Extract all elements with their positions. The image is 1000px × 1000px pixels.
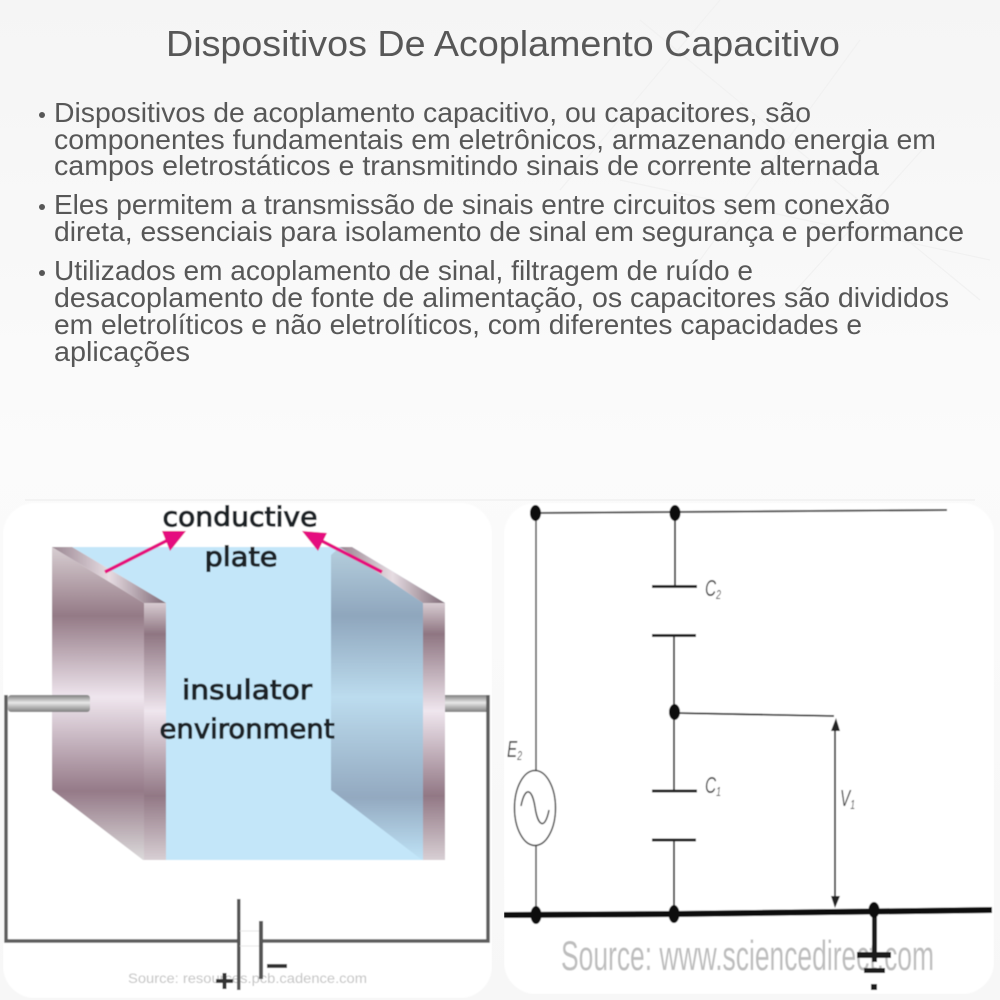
bullet 1 xyxy=(39,97,936,181)
capacitor branch xyxy=(652,513,697,915)
bullet 3: aplicações xyxy=(54,336,190,367)
label: C2: C xyxy=(705,575,722,601)
left conductive plate xyxy=(52,547,166,860)
bottom rail xyxy=(504,910,992,915)
bullet 3: em eletrolíticos e não eletrolíticos, com diferentes capacidades e xyxy=(54,309,862,340)
bullet list xyxy=(39,97,964,367)
left pin xyxy=(8,695,90,712)
label: insulator environment: environment xyxy=(160,714,334,745)
label: V1: V xyxy=(840,785,855,811)
right pin xyxy=(445,695,488,712)
label: E2: 2 xyxy=(517,748,523,763)
bullet 3 xyxy=(39,255,949,367)
battery symbol xyxy=(216,899,287,990)
label: C2: 2 xyxy=(715,587,722,602)
bullet 2 xyxy=(39,189,964,247)
panel: capacitor illustration xyxy=(3,502,492,998)
label: V1: 1 xyxy=(850,797,855,812)
left arrow xyxy=(105,531,186,572)
label: C1: C xyxy=(705,772,722,798)
circuit wire xyxy=(6,695,488,941)
ground symbol xyxy=(857,912,891,990)
bullet 2: direta, essenciais para isolamento de sinal em segurança e performance xyxy=(54,216,964,247)
voltage measurement xyxy=(675,713,840,908)
label: conductive plate: plate xyxy=(204,542,278,573)
right arrow xyxy=(302,531,382,572)
title: Dispositivos De Acoplamento Capacitivo xyxy=(166,23,840,64)
right conductive plate xyxy=(331,547,445,860)
insulator block xyxy=(72,547,445,860)
bullet 2: Eles permitem a transmissão de sinais entre circuitos sem conexão xyxy=(54,189,890,220)
bullet 1: componentes fundamentais em eletrônicos, armazenando energia em xyxy=(54,124,936,155)
source branch xyxy=(514,513,556,915)
label: insulator environment xyxy=(160,675,334,745)
bullet 1: campos eletrostáticos e transmitindo sinais de corrente alternada xyxy=(54,150,880,181)
junction nodes xyxy=(530,505,880,924)
label: E2: E xyxy=(507,736,522,762)
bullet 3: desacoplamento de fonte de alimentação, os capacitores são divididos xyxy=(54,282,949,313)
label: conductive plate: conductive xyxy=(162,502,318,533)
bullet 1: Dispositivos de acoplamento capacitivo, ou capacitores, são xyxy=(54,97,811,128)
label: conductive plate xyxy=(162,502,318,573)
label: insulator environment: insulator xyxy=(182,675,313,706)
top rail xyxy=(536,510,947,513)
source note: Source: resources.pcb.cadence.com xyxy=(128,971,367,986)
label: C1: 1 xyxy=(716,784,721,799)
bullet 3: Utilizados em acoplamento de sinal, filtragem de ruído e xyxy=(54,255,753,286)
panel: circuit diagram xyxy=(504,503,994,994)
